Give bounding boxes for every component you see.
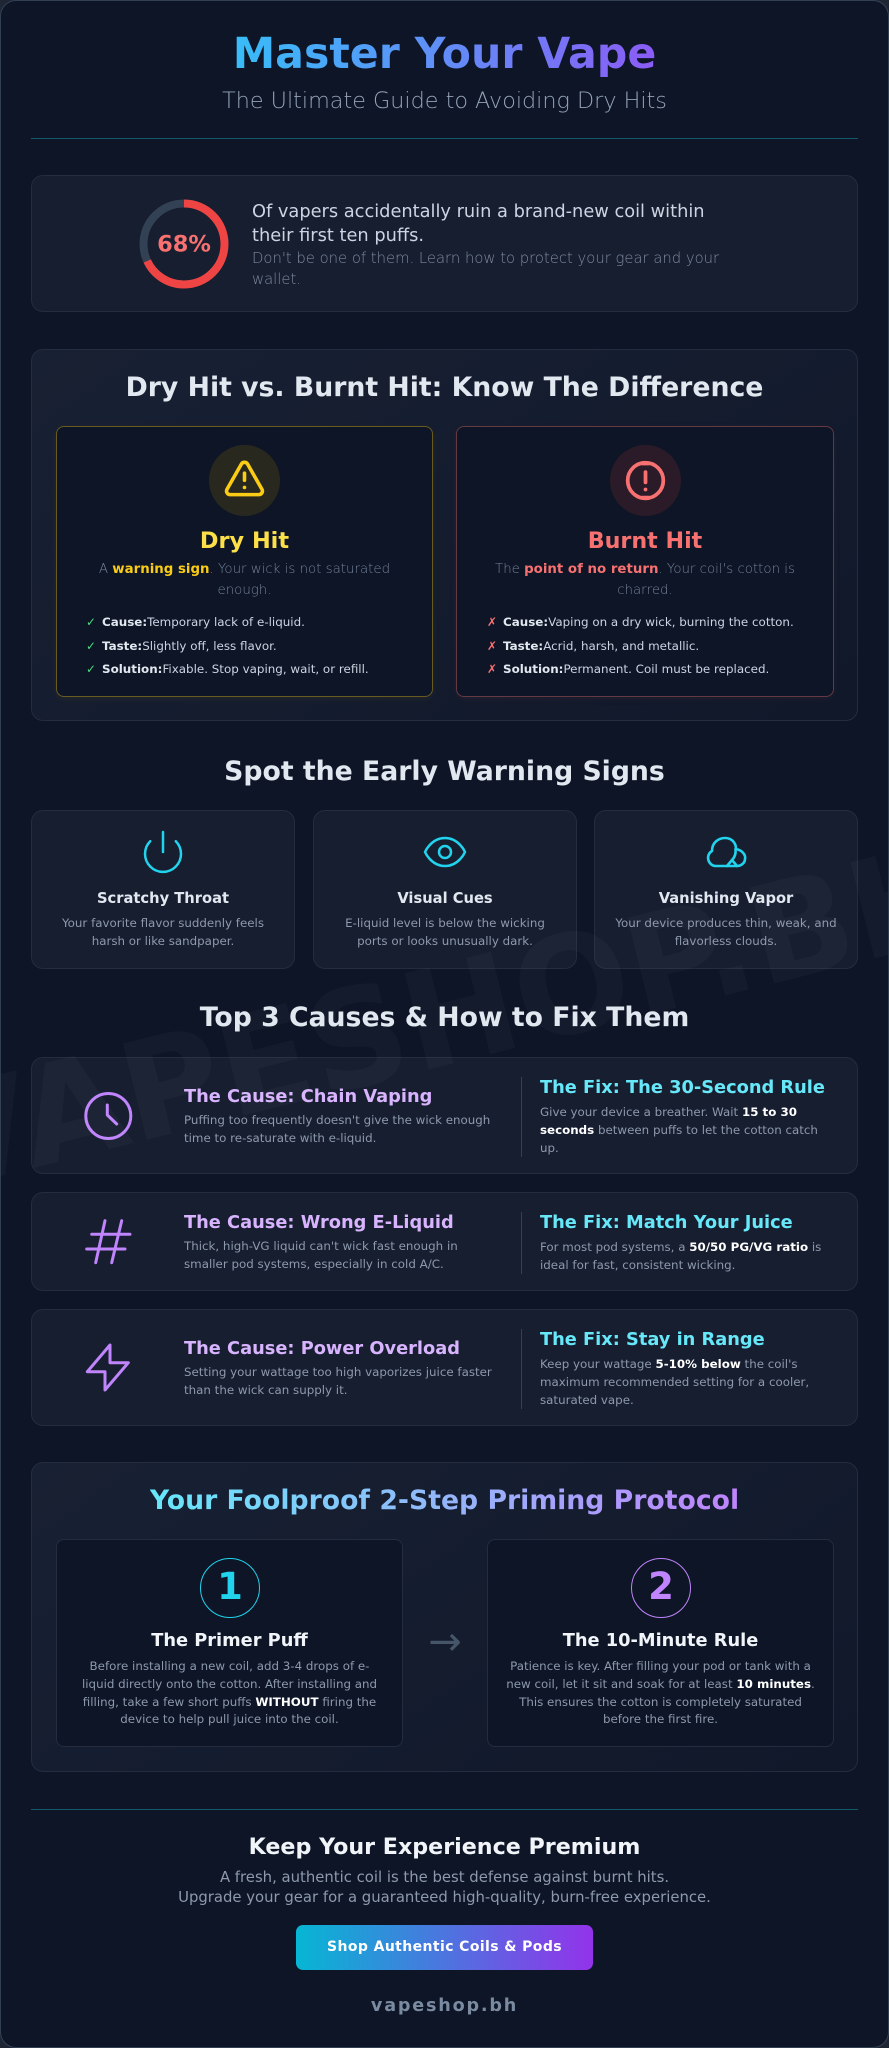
step text: Before installing a new coil, add 3-4 drops of e- bbox=[90, 1659, 369, 1673]
text bbox=[615, 916, 837, 948]
step title: The Primer Puff bbox=[151, 1630, 308, 1651]
footer text: A fresh, authentic coil is the best defense against burnt hits. bbox=[220, 1868, 669, 1886]
statistic headline: their first ten puffs. bbox=[252, 224, 424, 246]
text: harsh or like sandpaper. bbox=[92, 934, 234, 948]
button bbox=[296, 1925, 593, 1970]
burnt hit facts: Taste:Acrid, harsh, and metallic. bbox=[503, 638, 699, 652]
step text bbox=[506, 1659, 815, 1726]
burnt hit description: charred. bbox=[617, 583, 673, 598]
fix text bbox=[540, 1240, 821, 1272]
icon: alert circle bbox=[610, 445, 681, 516]
fix text: up. bbox=[540, 1141, 559, 1155]
heading: Dry Hit vs. Burnt Hit: Know The Difference bbox=[126, 372, 763, 403]
donut chart: 68% bbox=[140, 200, 228, 288]
dry hit facts: ✓ bbox=[86, 662, 96, 676]
fix title: The Fix: Match Your Juice bbox=[540, 1212, 793, 1233]
panel: dry hit vs burnt hit bbox=[31, 349, 858, 721]
icon: hash bbox=[85, 1219, 132, 1264]
cause text: Thick, high-VG liquid can't wick fast enough in bbox=[184, 1239, 458, 1253]
site name: vapeshop.bh bbox=[371, 1996, 518, 2016]
icon: cloud bbox=[706, 836, 746, 868]
icon: eye bbox=[424, 836, 466, 868]
header bbox=[222, 29, 667, 114]
step 2 bbox=[487, 1539, 834, 1747]
fix text: seconds between puffs to let the cotton catch bbox=[540, 1123, 818, 1137]
icon: lightning bolt bbox=[86, 1344, 130, 1392]
dry hit facts: ✓ bbox=[86, 615, 96, 629]
burnt hit facts bbox=[487, 615, 794, 676]
cause bbox=[184, 1212, 458, 1271]
panel: cause row 1 bbox=[31, 1057, 858, 1174]
step title: The 10-Minute Rule bbox=[563, 1630, 758, 1651]
text: Your favorite flavor suddenly feels bbox=[62, 916, 264, 930]
card: scratchy throat bbox=[31, 810, 295, 969]
burnt hit facts: Cause:Vaping on a dry wick, burning the cotton. bbox=[503, 615, 794, 629]
cause bbox=[184, 1338, 492, 1397]
dry hit facts: Taste:Slightly off, less flavor. bbox=[102, 638, 277, 652]
text: Your device produces thin, weak, and bbox=[615, 916, 837, 930]
heading: warning signs: Spot the Early Warning Signs bbox=[224, 756, 665, 787]
text: flavorless clouds. bbox=[675, 934, 777, 948]
step text: Patience is key. After filling your pod or tank with a bbox=[510, 1659, 811, 1673]
cause text: smaller pod systems, especially in cold A/C. bbox=[184, 1257, 444, 1271]
dry hit description: enough. bbox=[218, 583, 272, 598]
statistic headline bbox=[252, 201, 705, 246]
card: dry hit bbox=[56, 426, 433, 697]
step text: filling, take a few short puffs WITHOUT firing the bbox=[83, 1695, 376, 1709]
step 1 bbox=[56, 1539, 403, 1747]
statistic headline: Of vapers accidentally ruin a brand-new coil within bbox=[252, 201, 705, 222]
donut chart: 68%: 68% bbox=[157, 232, 211, 258]
footer heading: Keep Your Experience Premium bbox=[249, 1834, 640, 1860]
icon: power bbox=[144, 830, 182, 874]
fix text: saturated vape. bbox=[540, 1393, 634, 1407]
panel: cause row 3 bbox=[31, 1309, 858, 1426]
cause text: time to re-saturate with e-liquid. bbox=[184, 1131, 376, 1145]
fix bbox=[540, 1077, 825, 1155]
text: ports or looks unusually dark. bbox=[357, 934, 533, 948]
cause text: Puffing too frequently doesn't give the wick enough bbox=[184, 1113, 490, 1127]
step number 1: 1 bbox=[217, 1565, 243, 1608]
statistic note: Don't be one of them. Learn how to protect your gear and your bbox=[252, 250, 719, 267]
fix text: Keep your wattage 5-10% below the coil's bbox=[540, 1357, 798, 1371]
title: Master Your Vape bbox=[233, 29, 656, 79]
text bbox=[345, 916, 545, 948]
arrow: → bbox=[428, 1619, 462, 1665]
fix bbox=[540, 1329, 809, 1407]
title: Vanishing Vapor bbox=[659, 890, 793, 907]
step number 1 bbox=[200, 1558, 260, 1618]
footer text bbox=[178, 1868, 711, 1906]
cause text: Setting your wattage too high vaporizes juice faster bbox=[184, 1365, 492, 1379]
panel: cause row 2 bbox=[31, 1192, 858, 1291]
cause bbox=[184, 1086, 490, 1145]
icon: warning triangle bbox=[209, 445, 280, 516]
fix text: Give your device a breather. Wait 15 to 30 bbox=[540, 1105, 797, 1119]
title: Scratchy Throat bbox=[97, 890, 229, 907]
step text: before the first fire. bbox=[603, 1712, 718, 1726]
step text: This ensures the cotton is completely saturated bbox=[519, 1695, 802, 1709]
button: Shop Authentic Coils & Pods bbox=[327, 1939, 562, 1955]
dry hit facts: Solution:Fixable. Stop vaping, wait, or refill. bbox=[102, 662, 369, 676]
card: burnt hit bbox=[456, 426, 834, 697]
card: vanishing vapor bbox=[594, 810, 858, 969]
fix text: maximum recommended setting for a cooler, bbox=[540, 1375, 809, 1389]
cause text bbox=[184, 1365, 492, 1397]
icon: clock bbox=[84, 1092, 132, 1140]
card: visual cues bbox=[313, 810, 577, 969]
title: Visual Cues bbox=[397, 890, 493, 907]
fix text bbox=[540, 1357, 809, 1407]
burnt hit facts: ✗ bbox=[487, 662, 497, 676]
text bbox=[62, 916, 264, 948]
fix text bbox=[540, 1105, 818, 1155]
step number 2: 2 bbox=[648, 1565, 674, 1608]
fix text: ideal for fast, consistent wicking. bbox=[540, 1258, 735, 1272]
step text bbox=[82, 1659, 377, 1726]
cause text: than the wick can supply it. bbox=[184, 1383, 348, 1397]
fix title: The Fix: The 30-Second Rule bbox=[540, 1077, 825, 1098]
dry hit title: Dry Hit bbox=[200, 528, 289, 554]
burnt hit description bbox=[495, 562, 795, 598]
heading: causes: Top 3 Causes & How to Fix Them bbox=[200, 1002, 689, 1033]
fix text: For most pod systems, a 50/50 PG/VG ratio is bbox=[540, 1240, 821, 1254]
burnt hit facts: ✗ bbox=[487, 638, 497, 652]
dry hit description bbox=[99, 562, 390, 598]
step text: liquid directly onto the cotton. After installing and bbox=[82, 1677, 377, 1691]
panel: priming protocol bbox=[31, 1462, 858, 1772]
heading: Your Foolproof 2-Step Priming Protocol bbox=[150, 1485, 739, 1516]
subtitle: The Ultimate Guide to Avoiding Dry Hits bbox=[222, 88, 667, 114]
cause text bbox=[184, 1239, 458, 1271]
footer text: Upgrade your gear for a guaranteed high-quality, burn-free experience. bbox=[178, 1888, 711, 1906]
text: E-liquid level is below the wicking bbox=[345, 916, 545, 930]
burnt hit facts: Solution:Permanent. Coil must be replaced. bbox=[503, 662, 769, 676]
burnt hit description: The point of no return. Your coil's cotton is bbox=[495, 562, 795, 577]
step text: new coil, let it sit and soak for at least 10 minutes. bbox=[506, 1677, 815, 1691]
dry hit description: A warning sign. Your wick is not saturated bbox=[99, 562, 390, 577]
dry hit facts bbox=[86, 615, 369, 676]
footer bbox=[178, 1834, 711, 2016]
step text: device to help pull juice into the coil. bbox=[120, 1712, 339, 1726]
cause title: The Cause: Wrong E-Liquid bbox=[184, 1212, 454, 1233]
burnt hit facts: ✗ bbox=[487, 615, 497, 629]
cause text bbox=[184, 1113, 490, 1145]
dry hit facts: ✓ bbox=[86, 638, 96, 652]
statistic note bbox=[252, 250, 720, 288]
step number 2 bbox=[631, 1558, 691, 1618]
cause title: The Cause: Power Overload bbox=[184, 1338, 460, 1359]
dry hit facts: Cause:Temporary lack of e-liquid. bbox=[102, 615, 305, 629]
cause title: The Cause: Chain Vaping bbox=[184, 1086, 432, 1107]
burnt hit title: Burnt Hit bbox=[588, 528, 702, 554]
fix bbox=[540, 1212, 821, 1272]
panel: statistic bbox=[31, 175, 858, 312]
fix title: The Fix: Stay in Range bbox=[540, 1329, 765, 1350]
statistic note: wallet. bbox=[252, 271, 301, 288]
